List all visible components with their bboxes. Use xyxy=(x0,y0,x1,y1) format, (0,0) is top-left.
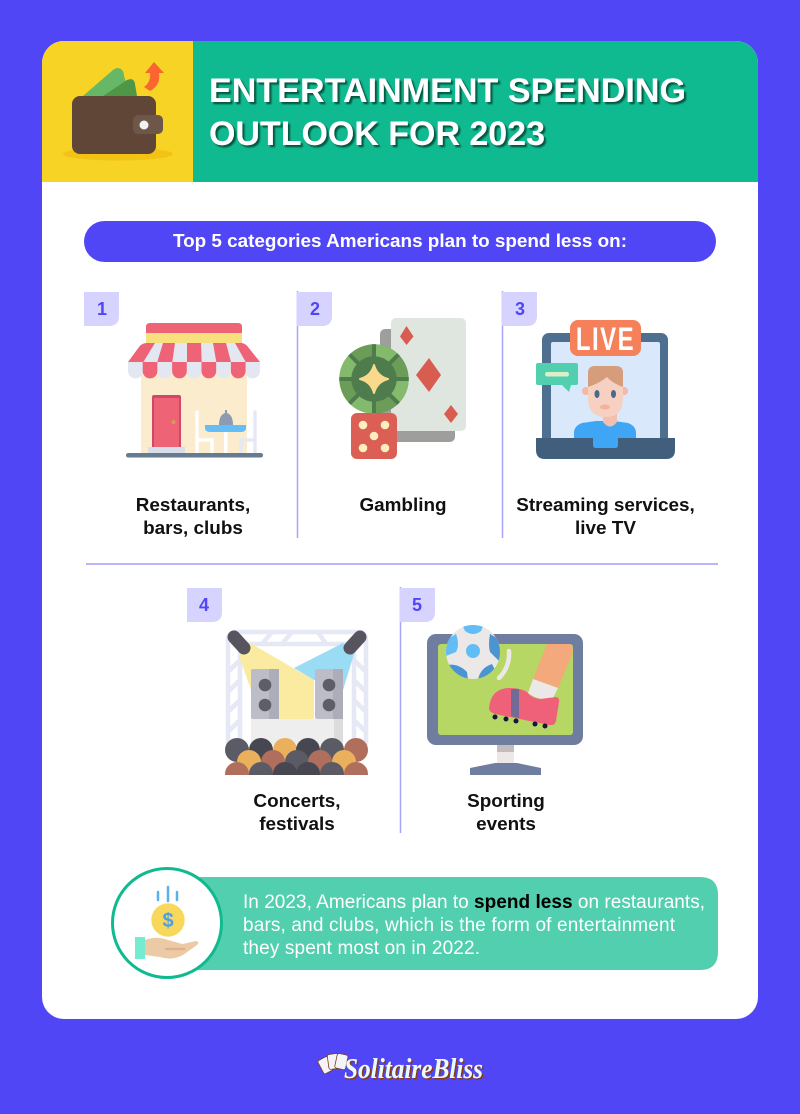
number badge 3: 3 xyxy=(515,299,525,319)
icon: hand with coin: $ xyxy=(162,910,174,932)
label xyxy=(516,495,695,539)
callout text xyxy=(243,892,705,959)
number badge 2: 2 xyxy=(310,299,320,319)
subtitle banner: Top 5 categories Americans plan to spend less on: xyxy=(173,231,627,252)
label: festivals xyxy=(259,814,335,835)
icon: card, chip and dice xyxy=(339,318,466,459)
panel: category 2 gambling xyxy=(297,292,466,516)
subtitle banner xyxy=(84,221,716,262)
label: bars, clubs xyxy=(143,518,243,539)
label xyxy=(253,791,341,835)
number badge 4: 4 xyxy=(199,595,209,615)
icon: live stream laptop: LIVE xyxy=(576,321,635,357)
label: Restaurants, xyxy=(136,495,250,516)
callout text: they spent most on in 2022. xyxy=(243,938,480,959)
number badge 5: 5 xyxy=(412,595,422,615)
icon: live stream laptop xyxy=(536,320,675,459)
label: events xyxy=(476,814,536,835)
logo: SolitaireBliss xyxy=(344,1054,483,1085)
panel: main card xyxy=(42,41,758,1019)
label: Sporting xyxy=(467,791,545,812)
panel: header xyxy=(42,41,758,182)
title: OUTLOOK FOR 2023 xyxy=(209,115,545,153)
icon: wallet with rising arrow xyxy=(63,62,173,160)
label: live TV xyxy=(575,518,636,539)
callout xyxy=(112,868,718,978)
label: Gambling xyxy=(359,495,447,516)
label xyxy=(136,495,250,539)
number badge 5 xyxy=(400,588,435,622)
number badge 1: 1 xyxy=(97,299,107,319)
icon: hand with coin xyxy=(112,868,222,978)
callout text: In 2023, Americans plan to spend less on restaurants, xyxy=(243,892,705,913)
number badge 4 xyxy=(187,588,222,622)
panel: category 5 sports xyxy=(400,588,583,835)
label: Streaming services, xyxy=(516,495,695,516)
number badge 2 xyxy=(297,292,332,326)
title xyxy=(209,72,686,153)
icon: restaurant storefront xyxy=(126,323,263,458)
label: Concerts, xyxy=(253,791,341,812)
icon: concert stage xyxy=(225,632,368,786)
number badge 1 xyxy=(84,292,119,326)
number badge 3 xyxy=(502,292,537,326)
title: ENTERTAINMENT SPENDING xyxy=(209,72,686,110)
icon: soccer on monitor xyxy=(427,624,583,775)
panel: category 3 streaming xyxy=(502,292,695,539)
label xyxy=(467,791,545,835)
panel: category 4 concerts xyxy=(187,588,368,835)
panel: category 1 restaurants xyxy=(84,292,263,539)
callout text: bars, and clubs, which is the form of entertainment xyxy=(243,915,676,936)
